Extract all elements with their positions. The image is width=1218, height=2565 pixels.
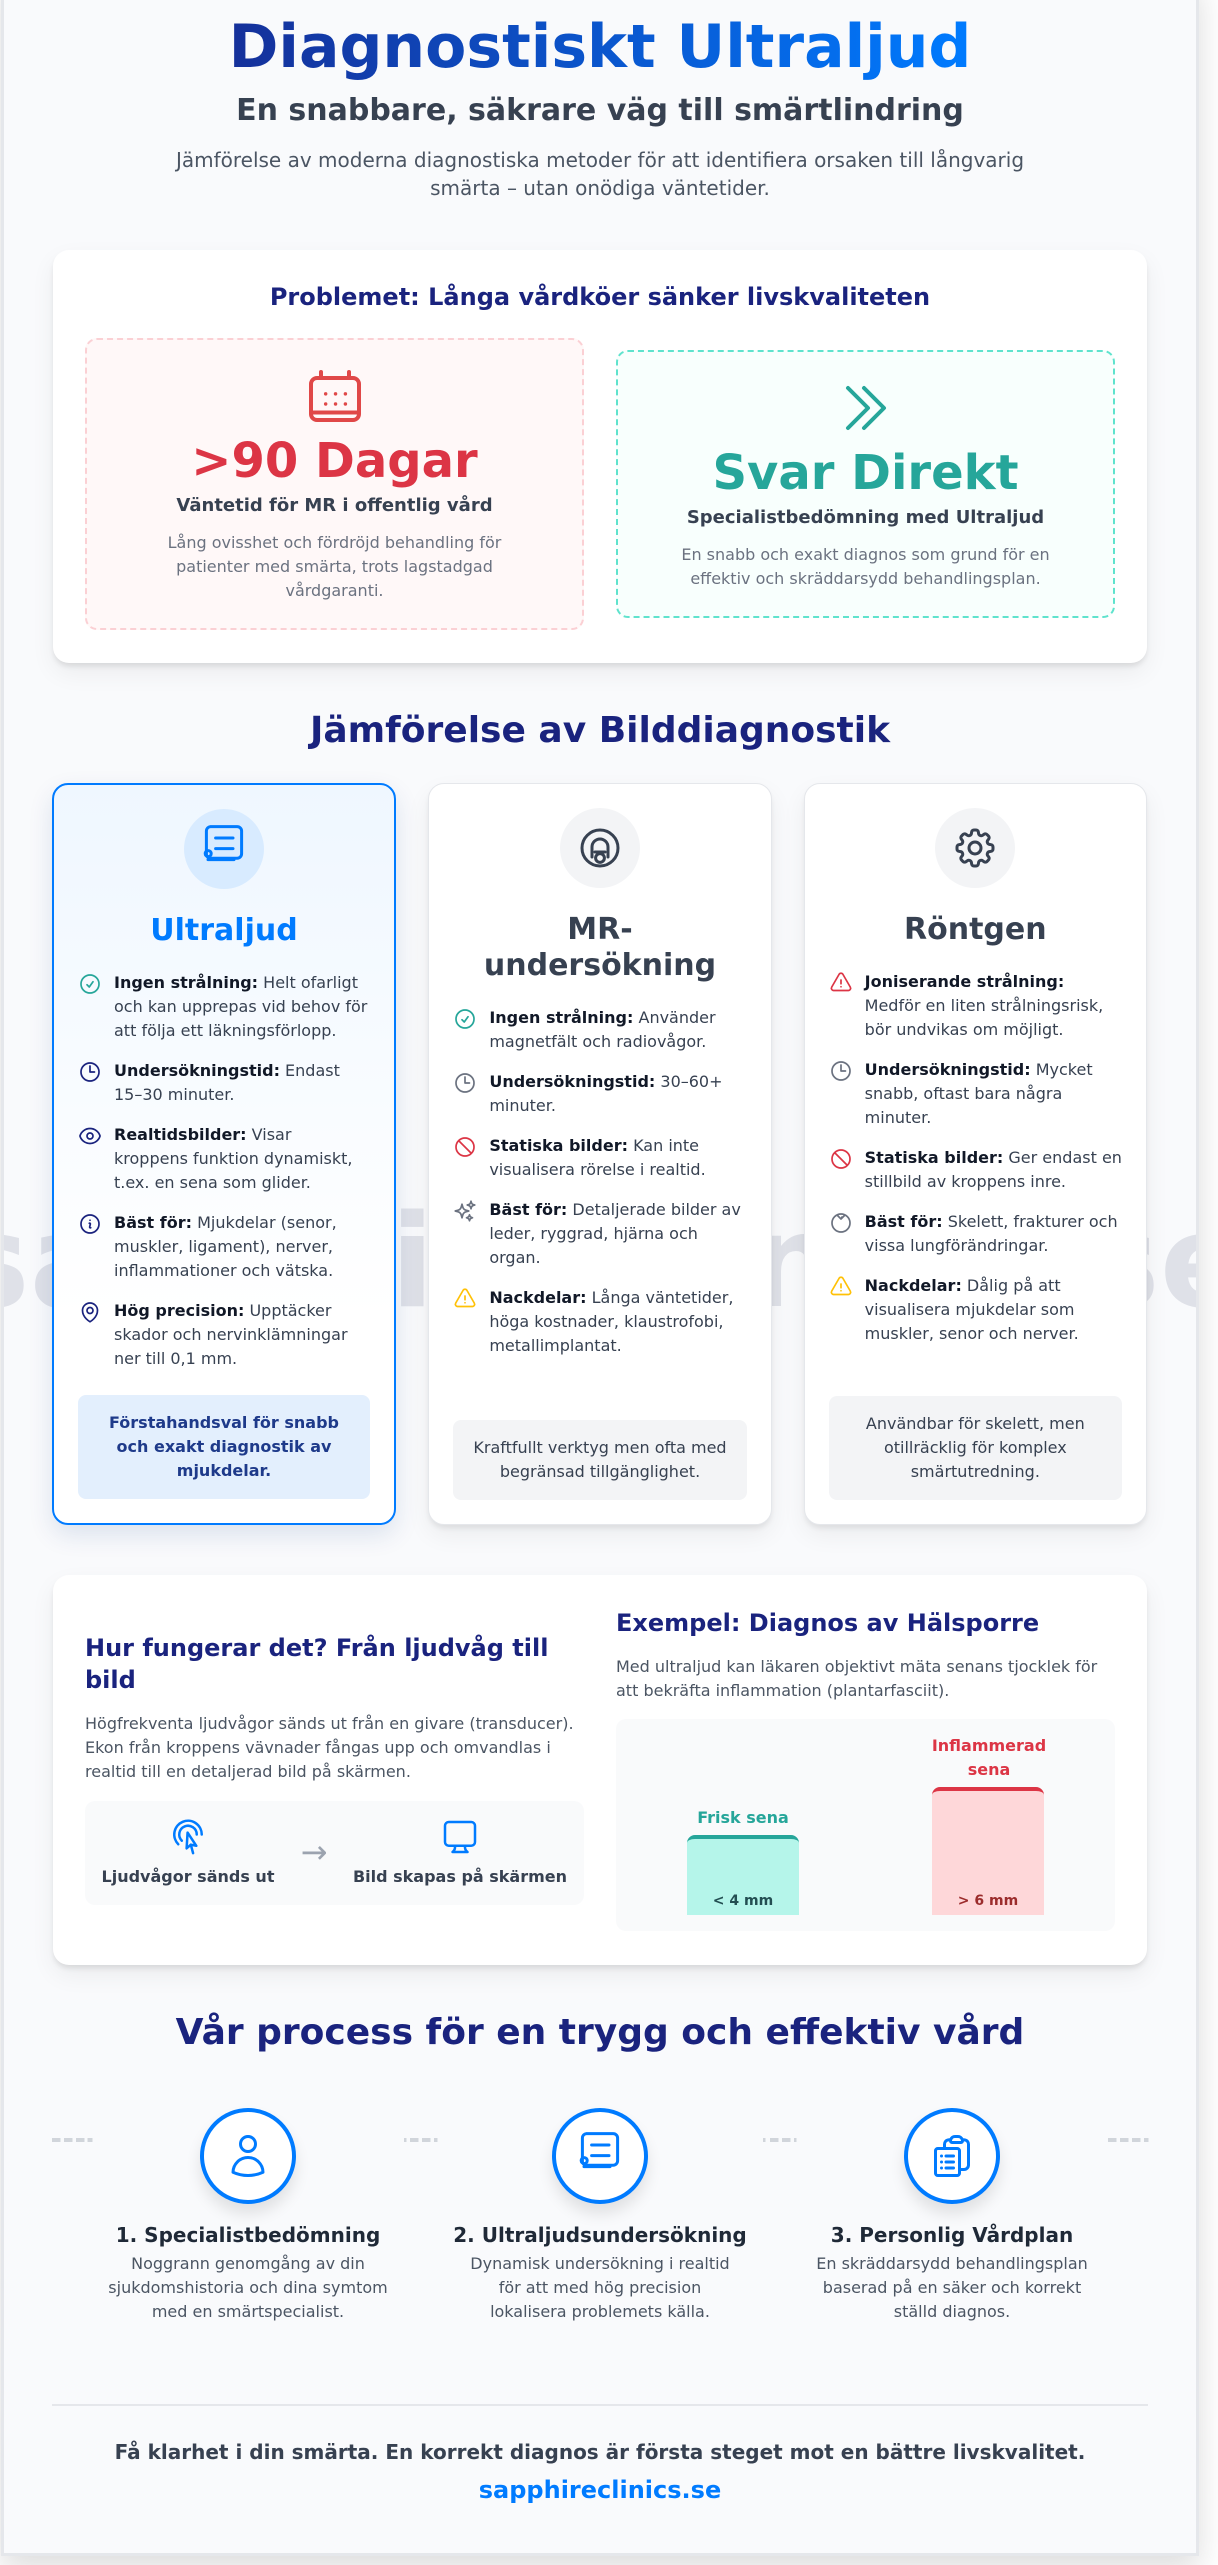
step 1 xyxy=(108,2108,388,2321)
verdict xyxy=(829,1396,1122,1500)
feature list xyxy=(454,1008,741,1355)
feature: precision: Hög precision: Upptäcker skador och nervinklämningar ner till 0,1 mm. xyxy=(114,1301,348,1368)
flow step: image on screen xyxy=(353,1820,567,1886)
icon: MR scanner xyxy=(560,808,640,888)
intro text: Jämförelse av moderna diagnostiska metoder för att identifiera orsaken till långvarig xyxy=(176,148,1024,172)
feature: radiation: Joniserande strålning: Medför en liten strålningsrisk, bör undvikas om möjligt. xyxy=(865,972,1103,1039)
verdict: Användbar för skelett, men otillräcklig för komplex smärtutredning. xyxy=(866,1414,1085,1481)
step description: för att med hög precision xyxy=(499,2278,701,2297)
card: MR xyxy=(428,783,772,1525)
bar value: < 4 mm xyxy=(713,1893,773,1909)
feature: realtime: Realtidsbilder: Visar kroppens funktion dynamiskt, t.ex. en sena som glider. xyxy=(114,1125,352,1192)
flow label: Ljudvågor sänds ut xyxy=(102,1867,274,1886)
card title: Röntgen xyxy=(904,912,1047,946)
intro text xyxy=(174,148,1024,200)
step description: Dynamisk undersökning i realtid xyxy=(470,2254,730,2273)
step title: 2. Ultraljudsundersökning xyxy=(453,2223,747,2247)
description: Med ultraljud kan läkaren objektivt mäta senans tjocklek för xyxy=(616,1657,1097,1676)
stat description: patienter med smärta, trots lagstadgad xyxy=(176,557,493,576)
verdict: Förstahandsval för snabb och exakt diagnostik av mjukdelar. xyxy=(109,1413,339,1480)
stat description: Lång ovisshet och fördröjd behandling för xyxy=(168,533,501,552)
panel: how it works and example xyxy=(53,1575,1147,1965)
panel: problem xyxy=(53,250,1147,663)
feature: drawbacks: Nackdelar: Dålig på att visualisera mjukdelar som muskler, senor och nerver. xyxy=(865,1276,1079,1343)
feature: best for: Bäst för: Detaljerade bilder av leder, ryggrad, hjärna och organ. xyxy=(489,1200,741,1267)
flow step: sound waves xyxy=(102,1820,274,1886)
process connector dashes xyxy=(52,2138,1148,2142)
flow label: Bild skapas på skärmen xyxy=(353,1867,567,1886)
feature: time: Undersökningstid: Endast 15–30 minuter. xyxy=(114,1061,340,1104)
bar label: inflamed xyxy=(932,1736,1046,1779)
stat: direct answer xyxy=(616,350,1115,618)
footer message: Få klarhet i din smärta. En korrekt diagnos är första steget mot en bättre livskvalitet. xyxy=(115,2440,1085,2464)
problem heading: Problemet: Långa vårdköer sänker livskvaliteten xyxy=(270,283,930,311)
step description: sjukdomshistoria och dina symtom xyxy=(108,2278,388,2297)
stat description: En snabb och exakt diagnos som grund för en xyxy=(681,545,1050,564)
step 3 xyxy=(816,2108,1088,2321)
step description: lokalisera problemets källa. xyxy=(490,2302,710,2321)
stat label: Väntetid för MR i offentlig vård xyxy=(176,495,493,516)
feature list xyxy=(79,973,368,1368)
stat: waiting time xyxy=(85,338,584,630)
heading: Exempel: Diagnos av Hälsporre xyxy=(616,1609,1039,1637)
step 2 xyxy=(453,2108,747,2321)
description xyxy=(616,1657,1098,1700)
feature: time: Undersökningstid: Mycket snabb, oftast bara några minuter. xyxy=(865,1060,1093,1127)
verdict: Kraftfullt verktyg men ofta med begränsad tillgänglighet. xyxy=(473,1438,727,1481)
card title: MR- xyxy=(567,912,633,946)
card: Röntgen xyxy=(804,783,1147,1525)
footer link: sapphireclinics.se xyxy=(479,2476,721,2504)
comparison heading: Jämförelse av Bilddiagnostik xyxy=(310,710,890,751)
stat description: effektiv och skräddarsydd behandlingsplan. xyxy=(690,569,1041,588)
bar: healthy tendon xyxy=(687,1835,799,1915)
feature: best for: Bäst för: Skelett, frakturer och vissa lungförändringar. xyxy=(865,1212,1118,1255)
feature: radiation: Ingen strålning: Använder magnetfält och radiovågor. xyxy=(489,1008,716,1051)
icon: monitor xyxy=(444,1820,476,1854)
column: how it works xyxy=(85,1634,574,1886)
bar label: inflamed: Inflammerad xyxy=(932,1736,1046,1755)
feature list xyxy=(830,972,1122,1343)
feature: static images: Statiska bilder: Kan inte visualisera rörelse i realtid. xyxy=(489,1136,706,1179)
description: realtid till en detaljerad bild på skärmen. xyxy=(85,1762,411,1781)
stat description xyxy=(681,545,1050,588)
stat value: Svar Direkt xyxy=(712,445,1019,501)
description: Högfrekventa ljudvågor sänds ut från en givare (transducer). xyxy=(85,1714,574,1733)
stat description: vårdgaranti. xyxy=(285,581,384,600)
column: example xyxy=(616,1609,1098,1915)
step description: ställd diagnos. xyxy=(894,2302,1010,2321)
feature: static images: stillbild av kroppens inre. xyxy=(865,1172,1066,1191)
process heading: Vår process för en trygg och effektiv vård xyxy=(176,2012,1024,2053)
intro text: smärta – utan onödiga väntetider. xyxy=(430,176,770,200)
arrow: → xyxy=(301,1833,327,1871)
step description: baserad på en säker och korrekt xyxy=(823,2278,1081,2297)
icon: gear xyxy=(935,808,1015,888)
icon: ultrasound xyxy=(552,2108,648,2204)
description xyxy=(85,1714,574,1781)
step title: 3. Personlig Vårdplan xyxy=(831,2223,1073,2247)
bar value: > 6 mm xyxy=(958,1893,1018,1909)
card title xyxy=(484,912,716,982)
icon: chevrons xyxy=(846,386,886,430)
stat label: Specialistbedömning med Ultraljud xyxy=(687,507,1044,528)
feature: radiation: Ingen strålning: Helt ofarligt och kan upprepas vid behov för att följa ett läkningsförlopp. xyxy=(114,973,367,1040)
step description xyxy=(470,2254,730,2321)
card title: undersökning xyxy=(484,948,716,982)
icon: calendar xyxy=(309,370,361,422)
feature: static images: Statiska bilder: Ger endast en xyxy=(865,1148,1122,1167)
verdict xyxy=(453,1420,747,1500)
subtitle: En snabbare, säkrare väg till smärtlindring xyxy=(236,93,964,128)
heading: Hur fungerar det? Från ljudvåg till bild xyxy=(85,1634,548,1694)
stat description xyxy=(168,533,502,600)
step description: En skräddarsydd behandlingsplan xyxy=(816,2254,1088,2273)
feature: best for: Bäst för: Mjukdelar (senor, muskler, ligament), nerver, inflammationer och vätska. xyxy=(114,1213,337,1280)
description: Ekon från kroppens vävnader fångas upp och omvandlas i xyxy=(85,1738,551,1757)
step title: 1. Specialistbedömning xyxy=(116,2223,380,2247)
bar: inflamed tendon xyxy=(932,1787,1044,1915)
icon: person xyxy=(200,2108,296,2204)
bar label: healthy: Frisk sena xyxy=(697,1808,789,1827)
bar chart xyxy=(616,1719,1115,1931)
icon: ultrasound xyxy=(184,809,264,889)
bar label: inflamed: sena xyxy=(968,1760,1010,1779)
card: Ultraljud xyxy=(52,783,396,1525)
icon: clipboard xyxy=(904,2108,1000,2204)
step description: med en smärtspecialist. xyxy=(152,2302,344,2321)
flow diagram xyxy=(85,1801,584,1905)
step description: Noggrann genomgång av din xyxy=(131,2254,365,2273)
verdict xyxy=(78,1395,370,1499)
stat value: >90 Dagar xyxy=(191,433,478,489)
step description xyxy=(782,2252,1122,2324)
feature: time: Undersökningstid: 30–60+ minuter. xyxy=(489,1072,723,1115)
title: Diagnostiskt Ultraljud xyxy=(229,12,971,82)
feature: drawbacks: Nackdelar: Långa väntetider, höga kostnader, klaustrofobi, metallimplantat. xyxy=(489,1288,733,1355)
icon: sound waves cursor xyxy=(173,1820,203,1854)
description: att bekräfta inflammation (plantarfasciit). xyxy=(616,1681,949,1700)
feature: static images xyxy=(831,1148,1122,1191)
step description xyxy=(108,2254,388,2321)
card title: Ultraljud xyxy=(150,912,298,948)
